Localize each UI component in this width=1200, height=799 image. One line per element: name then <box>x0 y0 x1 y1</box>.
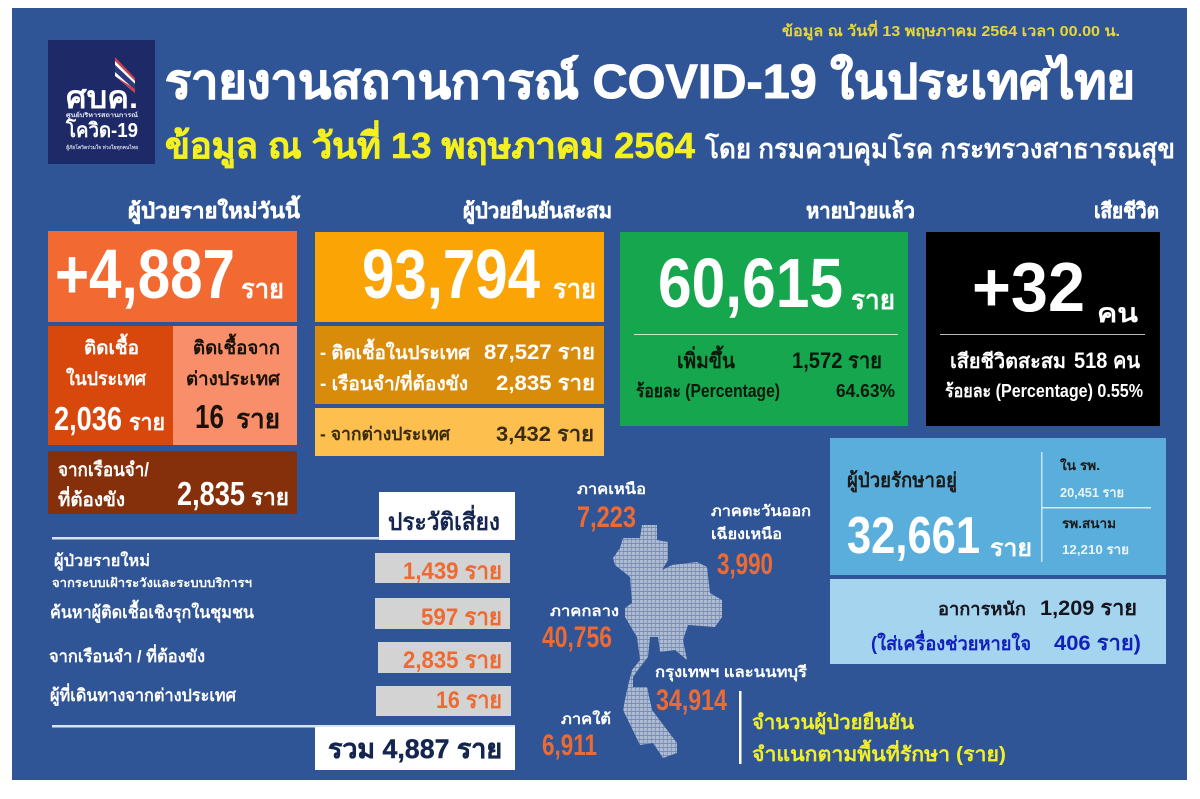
panel: deaths <box>926 232 1160 426</box>
map caption: จำนวนผู้ป่วยยืนยัน <box>752 711 914 736</box>
heading: risk history <box>379 492 515 540</box>
logo: ศบค. COVID-19 centre: สู้ภัยโควิดร่วมใจ ห่วงใยทุกคนไทย <box>66 144 138 152</box>
panel: recovered: 1,572 ราย <box>792 348 882 373</box>
logo: ศบค. COVID-19 centre: ศบค. <box>66 80 138 115</box>
panel: under treatment: รพ.สนาม <box>1062 516 1116 531</box>
subtitle: ข้อมูล ณ วันที่ 13 พฤษภาคม 2564 <box>165 120 695 169</box>
subtitle <box>165 120 1175 169</box>
panel: domestic infections <box>48 326 173 445</box>
panel: recovered: เพิ่มขึ้น <box>677 345 736 373</box>
risk row: prisons <box>49 642 511 674</box>
subtitle: โดย กรมควบคุมโรค กระทรวงสาธารณสุข <box>704 132 1175 166</box>
risk row: prisons: 2,835 ราย <box>403 647 502 674</box>
panel: cumulative from abroad <box>315 408 604 456</box>
region: Bangkok and Nonthaburi <box>655 664 808 717</box>
panel: imported infections: ติดเชื้อจาก <box>193 333 280 359</box>
region: south: 6,911 <box>542 729 597 762</box>
panel: deaths: ร้อยละ (Percentage) 0.55% <box>945 381 1143 401</box>
panel: imported infections: 16 <box>195 398 224 435</box>
panel: recovered: ร้อยละ (Percentage) <box>636 381 780 401</box>
region: Bangkok and Nonthaburi: กรุงเทพฯ และนนทบุรี <box>655 664 808 682</box>
heading: risk history: ประวัติเสี่ยง <box>388 504 500 536</box>
panel: from prisons: ที่ต้องขัง <box>58 486 125 511</box>
region: north: ภาคเหนือ <box>577 481 646 498</box>
map caption <box>739 691 1006 766</box>
region: Bangkok and Nonthaburi: 34,914 <box>656 684 727 717</box>
panel: domestic infections: ติดเชื้อ <box>84 333 139 359</box>
panel: cumulative domestic and prison: 2,835 ราย <box>496 372 595 395</box>
region: northeast: ภาคตะวันออก <box>711 503 811 520</box>
panel: under treatment: ราย <box>990 535 1032 562</box>
heading: new cases today: ผู้ป่วยรายใหม่วันนี้ <box>128 195 301 225</box>
heading: deaths: เสียชีวิต <box>1094 199 1159 223</box>
panel: domestic infections: ในประเทศ <box>66 367 147 390</box>
panel: severe cases: อาการหนัก <box>938 599 1026 619</box>
heading: recovered: หายป่วยแล้ว <box>806 199 915 223</box>
panel: severe cases: 406 ราย) <box>1054 632 1141 655</box>
panel: under treatment <box>830 438 1166 575</box>
panel: recovered: ราย <box>851 285 895 315</box>
panel: cumulative confirmed: ราย <box>553 274 596 304</box>
risk row: active case finding: ค้นหาผู้ติดเชื้อเชิงรุกในชุมชน <box>50 599 254 624</box>
panel: recovered: 64.63% <box>836 381 895 401</box>
panel: deaths: 518 คน <box>1074 348 1140 373</box>
logo: ศบค. COVID-19 centre: ศูนย์บริหารสถานการณ์ <box>66 111 139 120</box>
panel: cumulative domestic and prison <box>315 326 604 404</box>
region: northeast: 3,990 <box>717 548 773 581</box>
risk row: prisons: จากเรือนจำ / ที่ต้องขัง <box>49 644 205 666</box>
risk row: active case finding: 597 ราย <box>421 604 502 631</box>
panel: under treatment: ใน รพ. <box>1060 457 1100 473</box>
panel: from prisons <box>48 451 297 514</box>
panel: from prisons: ราย <box>251 484 289 510</box>
panel: severe cases: (ใส่เครื่องช่วยหายใจ <box>871 630 1031 655</box>
panel: domestic infections: ราย <box>129 409 165 435</box>
panel: under treatment: ผู้ป่วยรักษาอยู่ <box>847 469 957 494</box>
panel: cumulative domestic and prison: - เรือนจำ/ที่ต้องขัง <box>320 370 468 395</box>
region: north: 7,223 <box>577 501 636 534</box>
risk total <box>315 727 515 770</box>
risk row: surveillance <box>52 551 510 590</box>
panel: recovered: 60,615 <box>658 244 843 322</box>
risk row: travellers: 16 ราย <box>436 687 502 714</box>
panel: imported infections: ราย <box>236 404 280 434</box>
risk row: surveillance: ผู้ป่วยรายใหม่ <box>54 551 150 572</box>
region: south <box>542 710 611 762</box>
panel: cumulative from abroad: - จากต่างประเทศ <box>320 424 451 444</box>
region: northeast: เฉียงเหนือ <box>711 526 782 543</box>
panel: under treatment: 12,210 ราย <box>1062 542 1129 557</box>
panel: imported infections <box>173 326 297 445</box>
panel: domestic infections: 2,036 <box>54 400 122 437</box>
panel: cumulative confirmed <box>315 232 604 322</box>
panel: deaths: คน <box>1097 298 1138 328</box>
risk row: active case finding <box>50 598 510 631</box>
panel: under treatment: 32,661 <box>847 507 980 565</box>
panel: imported infections: ต่างประเทศ <box>186 369 281 390</box>
risk row: travellers: ผู้ที่เดินทางจากต่างประเทศ <box>50 683 237 707</box>
panel: deaths: +32 <box>972 248 1085 326</box>
panel: from prisons: จากเรือนจำ/ <box>58 459 150 481</box>
risk row: surveillance: 1,439 ราย <box>403 558 502 585</box>
region: central: 40,756 <box>542 621 612 654</box>
region: south: ภาคใต้ <box>561 710 611 728</box>
top date note: ข้อมูล ณ วันที่ 13 พฤษภาคม 2564 เวลา 00.00 น. <box>782 20 1120 41</box>
panel: severe cases <box>830 579 1166 664</box>
panel: cumulative from abroad: 3,432 ราย <box>496 423 594 446</box>
map of Thailand <box>613 525 722 758</box>
region: central: ภาคกลาง <box>550 603 619 620</box>
region: north <box>577 481 646 534</box>
panel: cumulative confirmed: 93,794 <box>362 235 540 313</box>
panel: cumulative domestic and prison: 87,527 ราย <box>484 341 595 364</box>
risk row: surveillance: จากระบบเฝ้าระวังและระบบบริการฯ <box>52 576 252 590</box>
title: รายงานสถานการณ์ COVID-19 ในประเทศไทย <box>165 53 1135 109</box>
panel: new cases: ราย <box>241 274 284 304</box>
panel: under treatment: 20,451 ราย <box>1060 485 1124 500</box>
region: central <box>542 603 619 654</box>
panel: recovered <box>620 232 908 426</box>
panel: severe cases: 1,209 ราย <box>1040 597 1137 620</box>
heading: cumulative cases: ผู้ป่วยยืนยันสะสม <box>463 199 612 225</box>
region: northeast <box>711 503 811 581</box>
panel: new cases: +4,887 <box>55 235 235 313</box>
panel: cumulative domestic and prison: - ติดเชื้อในประเทศ <box>320 338 471 364</box>
map caption: จำแนกตามพื้นที่รักษา (ราย) <box>752 739 1006 766</box>
panel: from prisons: 2,835 <box>177 475 245 512</box>
logo: ศบค. COVID-19 centre: โควิด-19 <box>65 118 138 142</box>
risk row: travellers <box>50 683 511 716</box>
logo: ศบค. COVID-19 centre <box>48 40 155 164</box>
panel: deaths: เสียชีวิตสะสม <box>950 350 1066 373</box>
risk total: รวม 4,887 ราย <box>328 734 502 764</box>
